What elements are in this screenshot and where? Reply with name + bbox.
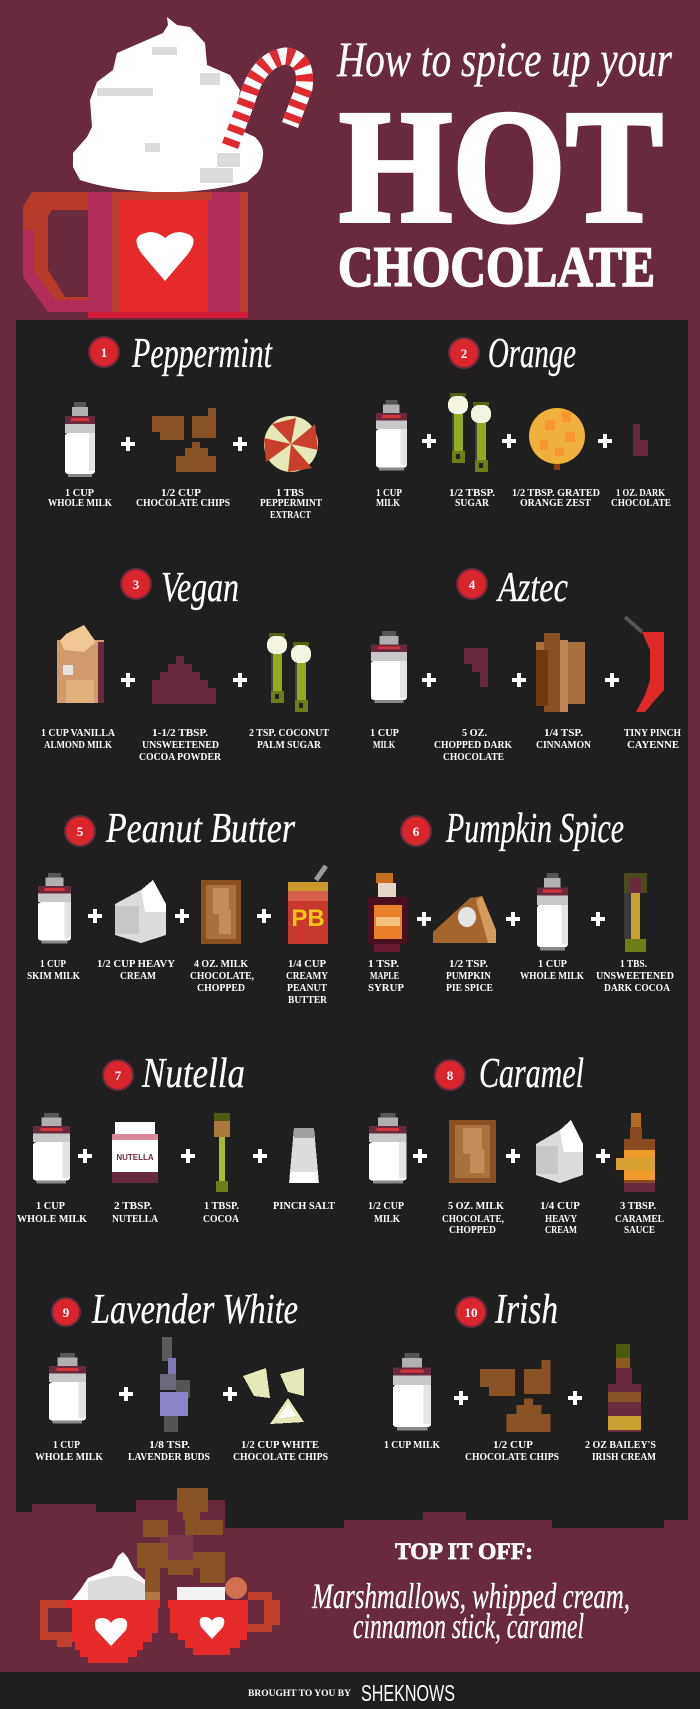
credit text: BROUGHT TO YOU BY bbox=[248, 1688, 352, 1698]
label: 1/2 CUP bbox=[368, 1201, 405, 1212]
label: 1/4 TSP. bbox=[544, 728, 583, 739]
icon: right mug bbox=[168, 1592, 280, 1655]
heading: Pumpkin Spice: Pumpkin Spice bbox=[445, 806, 624, 852]
label bbox=[286, 959, 328, 1006]
label: SYRUP bbox=[368, 983, 405, 994]
plus bbox=[417, 912, 431, 926]
plus bbox=[78, 1149, 92, 1163]
heading: Peanut Butter: Peanut Butter bbox=[105, 806, 296, 852]
badge 1 bbox=[89, 337, 119, 367]
label: SUGAR bbox=[455, 498, 489, 509]
icon: salt shaker bbox=[289, 1128, 319, 1183]
callout: top it off bbox=[311, 1539, 630, 1646]
plus bbox=[591, 912, 605, 926]
label bbox=[128, 1440, 210, 1463]
heading: Irish: Irish bbox=[494, 1287, 558, 1333]
plus bbox=[422, 673, 436, 687]
label: MILK bbox=[373, 740, 396, 751]
label bbox=[27, 959, 81, 982]
panel: recipe 9 lavender white bbox=[35, 1287, 328, 1463]
panel: recipe 2 orange bbox=[376, 331, 671, 509]
label: COCOA bbox=[203, 1214, 239, 1225]
icon: lavender sprig bbox=[160, 1337, 190, 1432]
icon: milk bbox=[537, 873, 568, 950]
label: CHOPPED bbox=[197, 983, 245, 994]
label: CHOCOLATE, bbox=[190, 971, 254, 982]
label: 5 OZ. bbox=[462, 728, 487, 739]
label: CHOPPED bbox=[449, 1225, 496, 1236]
label: PIE SPICE bbox=[446, 983, 493, 994]
label: 1 CUP VANILLA bbox=[41, 728, 115, 739]
label: WHOLE MILK bbox=[17, 1214, 88, 1225]
label: 1/4 CUP bbox=[288, 959, 327, 970]
icon: cinnamon steam bbox=[137, 1488, 225, 1608]
label: HEAVY bbox=[545, 1214, 577, 1225]
icon: cocoa spoon bbox=[214, 1113, 230, 1192]
plus bbox=[119, 1387, 133, 1401]
icon: milk bbox=[376, 400, 407, 470]
icon: milk chocolate bar bbox=[201, 880, 241, 944]
badge 10 bbox=[456, 1297, 486, 1327]
label: LAVENDER BUDS bbox=[128, 1452, 210, 1463]
icon: milk bbox=[33, 1113, 70, 1184]
label: CINNAMON bbox=[536, 740, 591, 751]
label: PINCH SALT bbox=[273, 1201, 335, 1212]
label: 1 CUP bbox=[40, 959, 67, 970]
icon: milk bbox=[49, 1353, 86, 1424]
icon: milk bbox=[371, 631, 407, 703]
panel: recipe 7 nutella bbox=[17, 1051, 335, 1225]
badge 4 bbox=[457, 569, 487, 599]
label: CREAM bbox=[545, 1225, 577, 1236]
label bbox=[611, 488, 671, 509]
icon: white chocolate chips bbox=[243, 1368, 304, 1424]
label: CAYENNE bbox=[627, 740, 679, 751]
label: 1 TSP. bbox=[368, 959, 399, 970]
badge 8: 8 bbox=[447, 1068, 454, 1083]
label bbox=[17, 1201, 88, 1225]
plus bbox=[422, 434, 436, 448]
label: ALMOND MILK bbox=[44, 740, 113, 751]
label bbox=[48, 488, 113, 509]
label: 1 OZ. DARK bbox=[616, 488, 666, 499]
plus bbox=[413, 1149, 427, 1163]
plus bbox=[605, 673, 619, 687]
icon: milk bbox=[369, 1113, 406, 1184]
label: 1 CUP bbox=[36, 1201, 66, 1212]
panel: recipe 3 vegan bbox=[41, 565, 329, 763]
icon: orange bbox=[529, 408, 585, 470]
icon: red mug bbox=[23, 192, 248, 318]
icon: measuring spoons bbox=[448, 393, 491, 472]
label: PALM SUGAR bbox=[257, 740, 321, 751]
label: 1/4 CUP bbox=[540, 1201, 581, 1212]
plus bbox=[506, 1149, 520, 1163]
icon: chocolate chips bbox=[152, 408, 216, 472]
title: HOT bbox=[339, 78, 663, 257]
plus bbox=[88, 909, 102, 923]
label: 1/2 TSP. bbox=[449, 959, 488, 970]
label: CHOPPED DARK bbox=[434, 740, 513, 751]
label: IRISH CREAM bbox=[592, 1452, 656, 1463]
label: WHOLE MILK bbox=[48, 498, 113, 509]
label: DARK COCOA bbox=[604, 983, 670, 994]
heading: Peppermint: Peppermint bbox=[131, 331, 273, 377]
label bbox=[35, 1440, 104, 1463]
label: 1-1/2 TBSP. bbox=[152, 728, 208, 739]
panel: recipe 5 peanut butter bbox=[27, 806, 328, 1006]
badge 3 bbox=[121, 569, 151, 599]
label bbox=[449, 488, 495, 509]
plus bbox=[233, 673, 247, 687]
badge 5 bbox=[65, 816, 95, 846]
label: TINY PINCH bbox=[624, 728, 681, 739]
icon: cocoa powder pile bbox=[152, 656, 216, 704]
label: 1 CUP bbox=[370, 728, 400, 739]
label: PEANUT bbox=[287, 983, 327, 994]
plus bbox=[568, 1391, 582, 1405]
label bbox=[203, 1201, 239, 1225]
icon: pumpkin pie slice bbox=[433, 896, 496, 943]
label: 4 OZ. MILK bbox=[194, 959, 249, 970]
icon: milk bbox=[38, 873, 71, 944]
badge 10: 10 bbox=[464, 1305, 478, 1320]
label bbox=[376, 488, 403, 509]
label: 1 TBS. bbox=[620, 959, 647, 970]
label: EXTRACT bbox=[270, 510, 311, 521]
label bbox=[368, 959, 405, 994]
label: CHOCOLATE CHIPS bbox=[233, 1452, 328, 1463]
panel: recipe 1 peppermint bbox=[48, 331, 322, 521]
plus bbox=[233, 437, 247, 451]
label: 1 TBS bbox=[276, 488, 304, 499]
badge 3: 3 bbox=[133, 577, 140, 592]
label: 2 OZ BAILEY'S bbox=[585, 1440, 656, 1451]
icon: candy cane bbox=[230, 56, 305, 146]
plus bbox=[175, 909, 189, 923]
icon: irish cream bottle bbox=[608, 1344, 641, 1432]
icon: almond milk carton bbox=[57, 625, 104, 703]
label: CHOCOLATE CHIPS bbox=[465, 1452, 559, 1463]
icon: milk chocolate bar bbox=[449, 1120, 496, 1183]
label bbox=[615, 1201, 664, 1236]
icon: peanut butter jar: PB bbox=[291, 905, 325, 932]
header illustration: mug with whipped cream and candy cane bbox=[23, 17, 305, 318]
label bbox=[139, 728, 221, 763]
icon: two mugs with steam bbox=[40, 1488, 280, 1663]
label: SKIM MILK bbox=[27, 971, 81, 982]
label bbox=[512, 488, 600, 509]
icon: nutella jar: NUTELLA bbox=[116, 1153, 154, 1162]
title bbox=[336, 31, 672, 299]
label: 1/2 CUP bbox=[161, 488, 202, 499]
icon: right heart bbox=[200, 1617, 224, 1639]
label: 1/8 TSP. bbox=[149, 1440, 190, 1451]
label bbox=[624, 728, 681, 751]
badge 7 bbox=[103, 1060, 133, 1090]
label: SAUCE bbox=[624, 1225, 655, 1236]
label: 1/2 CUP HEAVY bbox=[97, 959, 175, 970]
panel: recipe 4 aztec bbox=[370, 565, 681, 763]
heading: Vegan: Vegan bbox=[161, 565, 239, 611]
badge 6: 6 bbox=[413, 824, 420, 839]
label bbox=[260, 488, 322, 521]
label bbox=[112, 1201, 158, 1225]
icon: peanut butter jar bbox=[288, 866, 328, 944]
icon: chocolate chips bbox=[480, 1360, 550, 1432]
icon: dark chocolate bbox=[633, 424, 648, 456]
label: MAPLE bbox=[370, 971, 399, 982]
plus bbox=[121, 437, 135, 451]
badge 6 bbox=[401, 816, 431, 846]
icon: left mug bbox=[40, 1600, 160, 1663]
label: CHOCOLATE bbox=[611, 498, 671, 509]
icon: maple syrup bottle bbox=[368, 873, 407, 952]
label bbox=[540, 1201, 581, 1236]
panel: recipe 6 pumpkin spice bbox=[368, 806, 674, 994]
icon: heavy cream carton bbox=[536, 1120, 583, 1183]
label: 1 CUP MILK bbox=[384, 1440, 441, 1451]
icon: marshmallows and candy bbox=[177, 1577, 247, 1600]
plus bbox=[502, 434, 516, 448]
label: CREAMY bbox=[286, 971, 328, 982]
label bbox=[368, 1201, 405, 1225]
icon: whipped cream bbox=[73, 17, 263, 192]
icon: dark chocolate bbox=[464, 648, 488, 687]
label: 3 TBSP. bbox=[620, 1201, 656, 1212]
plus bbox=[223, 1387, 237, 1401]
plus bbox=[253, 1149, 267, 1163]
badge 9: 9 bbox=[63, 1305, 70, 1320]
badge 1: 1 bbox=[101, 345, 107, 360]
icon: milk bbox=[65, 402, 95, 477]
label: 2 TBSP. bbox=[114, 1201, 152, 1212]
label: 1/2 CUP WHITE bbox=[241, 1440, 319, 1451]
label: 1 CUP bbox=[53, 1440, 81, 1451]
badge 2: 2 bbox=[461, 346, 467, 361]
label: PEPPERMINT bbox=[260, 498, 322, 509]
icon: cinnamon sticks bbox=[536, 633, 585, 712]
label bbox=[585, 1440, 656, 1463]
label: 1/2 CUP bbox=[493, 1440, 534, 1451]
label bbox=[136, 488, 230, 509]
plus bbox=[596, 1149, 610, 1163]
text: toppings bbox=[311, 1576, 630, 1646]
badge 8 bbox=[435, 1060, 465, 1090]
label bbox=[442, 1201, 505, 1236]
label bbox=[41, 728, 115, 751]
icon: gold measuring spoon bbox=[624, 873, 647, 952]
plus bbox=[512, 673, 526, 687]
label: CARAMEL bbox=[615, 1214, 664, 1225]
icon: heavy cream carton bbox=[115, 880, 166, 943]
icon: heart bbox=[136, 232, 194, 281]
label: CREAM bbox=[120, 971, 156, 982]
plus bbox=[454, 1391, 468, 1405]
label: MILK bbox=[374, 1214, 401, 1225]
plus bbox=[181, 1149, 195, 1163]
label: PUMPKIN bbox=[446, 971, 491, 982]
icon: left mug cream bbox=[72, 1552, 145, 1600]
label: 5 OZ. MILK bbox=[448, 1201, 505, 1212]
label bbox=[465, 1440, 559, 1463]
label: 1 CUP bbox=[65, 488, 95, 499]
icon: caramel sauce bottle bbox=[616, 1113, 655, 1192]
label: 1/2 TBSP. bbox=[449, 488, 495, 499]
label bbox=[233, 1440, 328, 1463]
heading: Lavender White: Lavender White bbox=[91, 1287, 298, 1333]
text: toppings: cinnamon stick, caramel bbox=[353, 1606, 584, 1646]
label: COCOA POWDER bbox=[139, 752, 221, 763]
label: CHOCOLATE bbox=[443, 752, 504, 763]
label bbox=[536, 728, 591, 751]
badge 4: 4 bbox=[469, 577, 476, 592]
label bbox=[434, 728, 513, 763]
label bbox=[520, 959, 585, 982]
label: CHOCOLATE CHIPS bbox=[136, 498, 230, 509]
panel: recipe 8 caramel bbox=[368, 1051, 664, 1236]
heading: top it off: TOP IT OFF: bbox=[395, 1539, 533, 1564]
label: UNSWEETENED bbox=[142, 740, 219, 751]
heading: Nutella: Nutella bbox=[141, 1051, 245, 1097]
logo: SheKnows wordmark: SHEKNOWS bbox=[361, 1680, 455, 1706]
label: 2 TSP. COCONUT bbox=[249, 728, 329, 739]
label: 1 CUP bbox=[538, 959, 568, 970]
label: WHOLE MILK bbox=[35, 1452, 104, 1463]
icon: peppermint candy bbox=[264, 416, 318, 472]
label bbox=[249, 728, 329, 751]
icon: milk bbox=[393, 1353, 431, 1430]
heading: Aztec: Aztec bbox=[496, 565, 568, 611]
heading: Caramel: Caramel bbox=[479, 1051, 584, 1097]
badge 5: 5 bbox=[77, 824, 84, 839]
panel: dark recipe board bbox=[16, 320, 688, 1528]
plus bbox=[121, 673, 135, 687]
badge 2 bbox=[449, 338, 479, 368]
heading: Orange: Orange bbox=[488, 331, 576, 377]
icon: left heart bbox=[95, 1618, 127, 1646]
badge 7: 7 bbox=[115, 1068, 122, 1083]
label bbox=[596, 959, 674, 994]
label bbox=[97, 959, 175, 982]
icon: nutella jar bbox=[112, 1122, 158, 1183]
label: 1/2 TBSP. GRATED bbox=[512, 488, 600, 499]
panel: recipe 10 irish bbox=[384, 1287, 656, 1463]
label bbox=[446, 959, 493, 994]
label: BUTTER bbox=[288, 995, 327, 1006]
icon: cayenne chili bbox=[625, 617, 664, 712]
label: MILK bbox=[376, 498, 401, 509]
label: ORANGE ZEST bbox=[520, 498, 591, 509]
footer bbox=[0, 1672, 700, 1709]
label: 1 CUP bbox=[376, 488, 403, 499]
icon: measuring spoons bbox=[267, 633, 311, 712]
label bbox=[190, 959, 254, 994]
label: WHOLE MILK bbox=[520, 971, 585, 982]
plus bbox=[257, 909, 271, 923]
title: CHOCOLATE bbox=[338, 236, 655, 299]
plus bbox=[506, 912, 520, 926]
label: CHOCOLATE, bbox=[442, 1214, 504, 1225]
label: UNSWEETENED bbox=[596, 971, 674, 982]
label bbox=[370, 728, 400, 751]
label: 1 TBSP. bbox=[204, 1201, 239, 1212]
badge 9 bbox=[52, 1298, 80, 1326]
plus bbox=[598, 434, 612, 448]
label: NUTELLA bbox=[112, 1214, 158, 1225]
